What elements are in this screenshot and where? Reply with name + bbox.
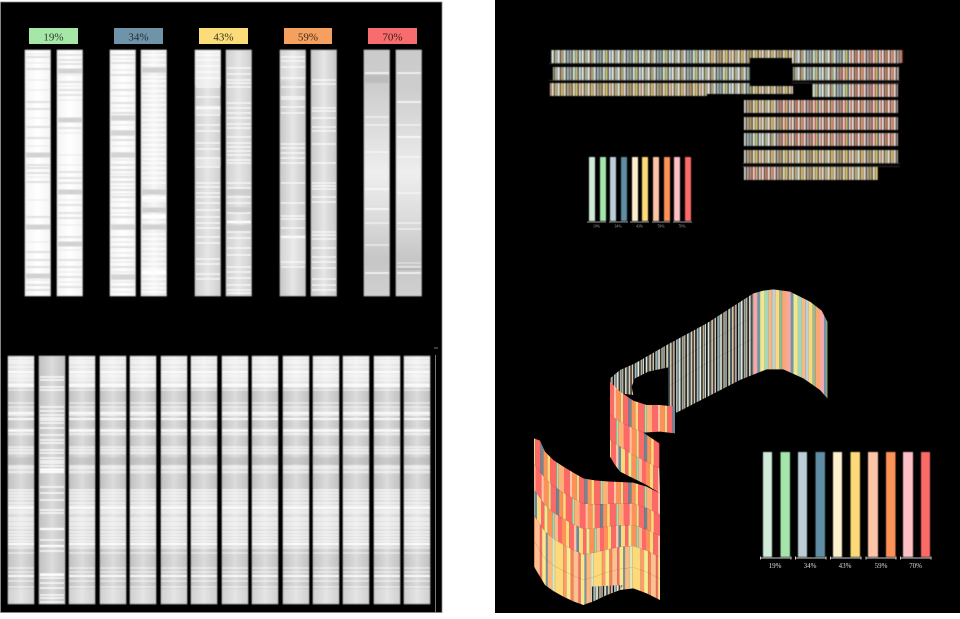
label: 59%: 59%: [298, 32, 318, 44]
strip 13: [374, 356, 400, 604]
group: 34 percent strips: [110, 28, 166, 296]
row rules: [549, 64, 900, 166]
label: 70%: [368, 28, 417, 44]
group: 19 percent strips: [25, 28, 82, 296]
barcode rows: sequence map: [549, 50, 903, 180]
strip 4: [100, 356, 126, 604]
strip: 43% sample A: [195, 50, 221, 296]
strip 8: [222, 356, 248, 604]
label: 43%: 43%: [213, 32, 234, 44]
small legend bars: [589, 157, 691, 221]
scale line beside matrix: [434, 348, 438, 612]
strip 9: [252, 356, 278, 604]
ribbon top row 1: [610, 293, 753, 395]
strip: 19% sample B: [57, 50, 82, 296]
large legend labels: [769, 562, 922, 570]
ribbon lower row 3: [534, 490, 660, 557]
strip 3: [69, 356, 95, 604]
panel: right black background: [495, 0, 960, 613]
label: 19%: 19%: [43, 32, 64, 44]
large legend labels: 70%: [909, 562, 922, 570]
label: 43%: [199, 28, 248, 44]
group: 70 percent strips: [364, 28, 422, 296]
strip 11: [313, 356, 339, 604]
group: 59 percent strips: [280, 28, 336, 296]
strip 2: contrasting sample: [39, 356, 65, 604]
ribbon top row 3: [668, 338, 753, 413]
row 1: [551, 50, 903, 63]
ribbon lower row 2: [534, 464, 660, 536]
large legend labels: 19%: [769, 562, 782, 570]
label: 19%: [29, 28, 78, 44]
strip 6: [161, 356, 187, 604]
small legend brackets: [587, 221, 692, 223]
small legend labels: 70%: [679, 224, 686, 228]
strip: 43% sample B: [226, 50, 252, 296]
ribbon top row 2: [668, 317, 753, 387]
ribbon middle row 2: [610, 415, 659, 468]
ribbon: folded sequence surface: [534, 289, 827, 605]
large legend brackets: [760, 556, 931, 560]
small legend labels: 34%: [615, 224, 622, 228]
large legend labels: 59%: [875, 562, 888, 570]
label: 34%: 34%: [128, 32, 149, 44]
strip 7: [191, 356, 217, 604]
ribbon dark patch: [591, 585, 623, 603]
large legend labels: 34%: [804, 562, 817, 570]
strip: 70% sample A: [364, 50, 390, 296]
ribbon lower row 4: [534, 515, 660, 580]
small legend labels: 43%: [636, 224, 644, 228]
row 6: [744, 133, 898, 146]
row 5: [744, 117, 898, 130]
row 2: [553, 67, 899, 80]
panel: left black background: [0, 2, 442, 612]
label: 59%: [284, 28, 332, 44]
row 8: [744, 167, 878, 180]
ribbon middle row 1: [610, 382, 675, 433]
ribbon middle row 3: [610, 440, 660, 493]
small legend labels: 59%: [658, 224, 665, 228]
strip: 59% sample B: [311, 50, 336, 296]
small legend labels: [593, 224, 686, 228]
strip 1: [8, 356, 34, 604]
strip: 34% sample B: [141, 50, 166, 296]
ribbon lower row 1: [534, 438, 660, 515]
group: bottom matrix of strips: [8, 356, 430, 604]
small legend labels: 19%: [593, 224, 601, 228]
row 3: [550, 83, 898, 97]
strip 14: [404, 356, 430, 604]
label: 70%: 70%: [382, 32, 403, 44]
row 4: [744, 100, 898, 113]
strip 5: [130, 356, 156, 604]
ribbon pale end: [753, 289, 827, 398]
group: 43 percent strips: [195, 28, 252, 296]
strip: 19% sample A: [25, 50, 50, 296]
strip: 34% sample A: [110, 50, 136, 296]
strip: 59% sample A: [280, 50, 306, 296]
strip: 70% sample B: [396, 50, 422, 296]
row 7: [744, 150, 898, 163]
label: 34%: [114, 28, 163, 44]
large legend labels: 43%: [839, 562, 852, 570]
small colour legend: [587, 157, 692, 228]
large colour legend: [760, 452, 931, 570]
strip 10: [283, 356, 309, 604]
ribbon lower row 5: [534, 541, 660, 605]
large legend bars: [763, 452, 930, 557]
strip 12: [343, 356, 369, 604]
